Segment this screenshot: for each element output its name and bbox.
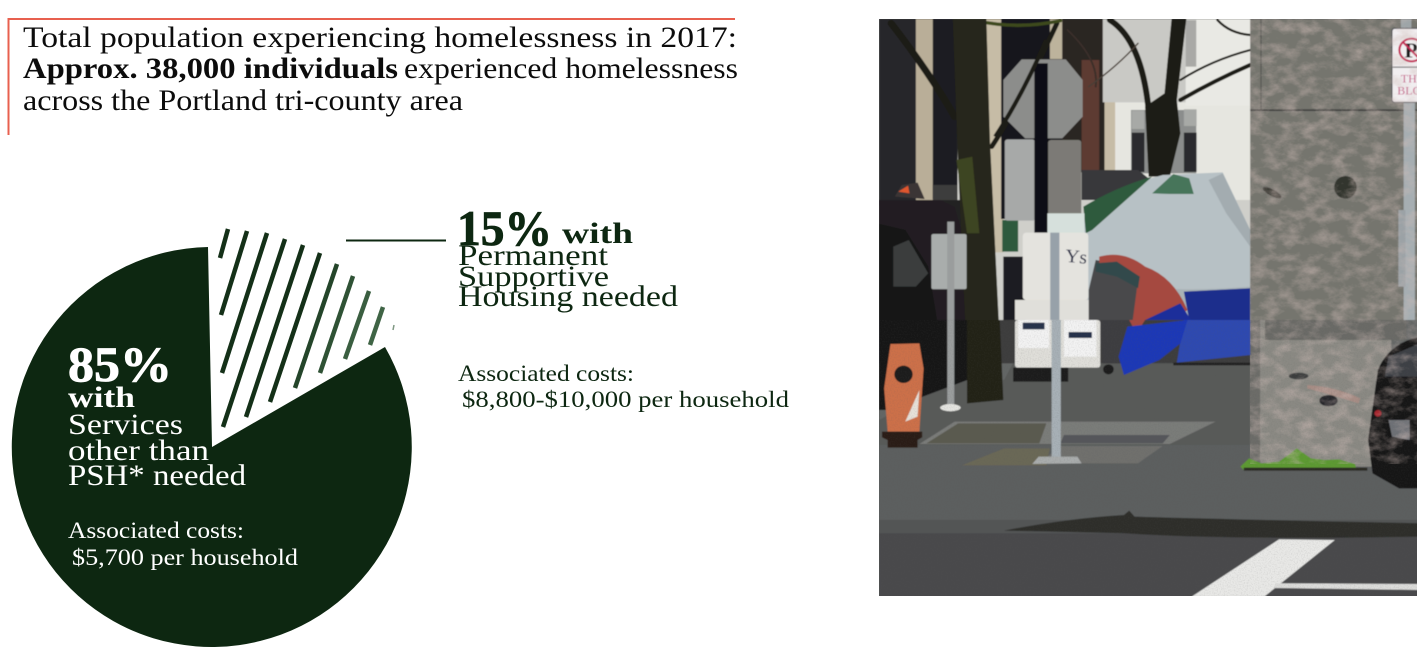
heading: total population: experienced homelessness [404, 52, 738, 85]
text: 85% label inside pie [68, 336, 299, 570]
sign backs on black pole [1003, 59, 1083, 138]
text: 85% label inside pie: other than [68, 434, 209, 467]
car behind tent [1082, 170, 1149, 200]
heading: total population: across the Portland tri-county area [23, 84, 463, 117]
text: 15% label: Associated costs: [458, 361, 634, 386]
tree trunks and branches [891, 20, 1250, 147]
pie chart [12, 229, 412, 647]
dark car [1368, 337, 1420, 488]
text: 85% label inside pie: 85% [68, 336, 172, 392]
broken curb [1004, 511, 1420, 538]
text: 85% label inside pie: Associated costs: [68, 518, 244, 543]
parked cars [879, 200, 880, 224]
upper street scene [879, 19, 1420, 323]
granite wall [1250, 19, 1420, 320]
heading: total population: Total population experiencing homelessness in 2017: [23, 21, 737, 54]
fire hydrant [882, 343, 924, 448]
text: 15% label: Housing needed [458, 280, 678, 313]
lower sidewalk and street [879, 320, 1420, 597]
blue tarp and sleeping bag [1184, 288, 1250, 320]
text: 85% label inside pie: with [68, 381, 135, 414]
text: 15% label: $8,800-$10,000 per household [462, 387, 790, 412]
tent [1084, 172, 1250, 300]
text: 85% label inside pie: Services [68, 408, 183, 441]
photo: tent on a city sidewalk [879, 19, 1420, 597]
weeds [1240, 448, 1357, 470]
pie slice: 85% services other than PSH [12, 247, 412, 647]
text: 15% label [457, 200, 790, 412]
photo grain [879, 320, 1417, 596]
header frame [8, 19, 735, 135]
text: 15% label: Supportive [458, 260, 609, 293]
text: 85% label inside pie: PSH* needed [68, 459, 246, 492]
no parking sign [1404, 103, 1415, 323]
text: 85% label inside pie: $5,700 per household [72, 545, 299, 570]
heading: total population: Approx. 38,000 individuals [23, 52, 398, 85]
text: 15% label: Permanent [458, 239, 609, 272]
sleeping bag and tarp base [1100, 320, 1138, 363]
granite blotches [1250, 19, 1420, 464]
signs on post [1047, 213, 1084, 233]
heading: total population [23, 21, 738, 117]
upper street scene: P [1404, 39, 1418, 62]
text: 15% label: 15% [457, 200, 552, 256]
upper street scene: Ys [1064, 246, 1088, 269]
crosswalk stripe [1192, 539, 1335, 597]
tree trunk, pole and signs [967, 320, 1003, 403]
leader line from hatched slice to label [346, 240, 446, 242]
text: 15% label: with [562, 217, 633, 250]
granite column base [1250, 320, 1391, 467]
pie slice: 15% permanent supportive housing (hatched) [220, 229, 394, 427]
